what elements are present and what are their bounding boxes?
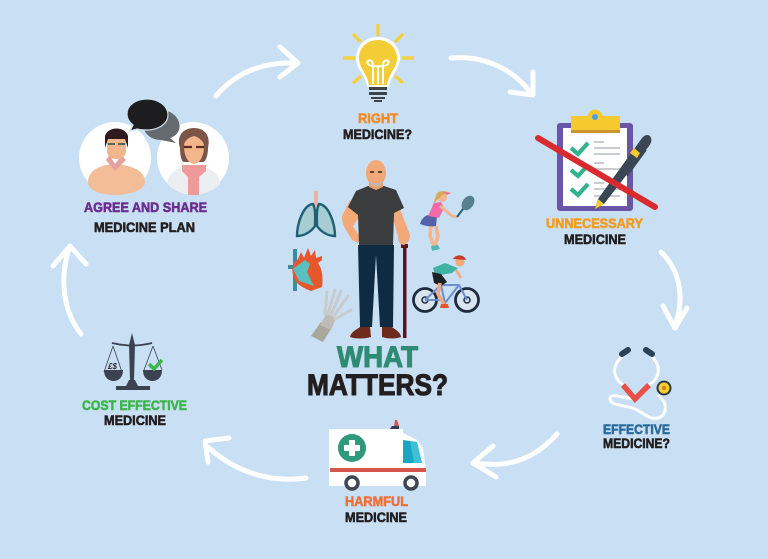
arrow: agree and share to right medicine xyxy=(216,47,298,96)
panel: unnecessary medicine xyxy=(538,110,655,247)
icon: ambulance xyxy=(329,420,426,489)
icon: pen xyxy=(595,135,651,209)
icon: black speech bubble xyxy=(127,99,168,131)
label: harmful: HARMFUL xyxy=(345,493,408,509)
arrow: effective medicine to harmful medicine xyxy=(473,434,557,477)
label: agree and share: AGREE AND SHARE xyxy=(84,199,207,215)
icon: skeletal hand xyxy=(311,290,351,342)
icon: heart xyxy=(288,248,323,291)
label: cost effective: COST EFFECTIVE xyxy=(82,397,187,413)
icon: stethoscope xyxy=(610,350,670,418)
icon: light bulb xyxy=(343,24,414,102)
panel: what matters centre xyxy=(288,160,478,402)
heading: what: WHAT xyxy=(337,341,418,374)
panel: harmful medicine xyxy=(329,420,426,525)
arrow: harmful medicine to cost effective medicine xyxy=(205,438,306,479)
label: medicine: MEDICINE xyxy=(564,231,626,247)
label: medicine?: MEDICINE? xyxy=(343,126,412,142)
panel: cost effective medicine xyxy=(82,333,187,428)
icon: lungs xyxy=(297,191,335,236)
panel: effective medicine xyxy=(603,350,670,451)
icon: female doctor xyxy=(157,122,229,195)
icon: grey speech bubble xyxy=(143,111,180,143)
label: medicine plan: MEDICINE PLAN xyxy=(94,219,195,235)
label: medicine: MEDICINE xyxy=(345,509,407,525)
icon: clipboard xyxy=(557,110,633,211)
icon: balance scale: £$ xyxy=(107,362,117,371)
panel: right medicine xyxy=(343,24,414,142)
label: medicine: MEDICINE xyxy=(104,412,166,428)
heading: matters?: MATTERS? xyxy=(307,369,448,402)
arrow: cost effective medicine to agree and share xyxy=(53,246,86,334)
icon: tennis player xyxy=(420,191,477,251)
icon: red cross-out line xyxy=(538,138,655,207)
icon: cyclist xyxy=(414,255,478,312)
label: right: RIGHT xyxy=(358,110,398,126)
arrow: right medicine to unnecessary medicine xyxy=(451,58,533,95)
label: effective: EFFECTIVE xyxy=(603,421,670,437)
arrow: unnecessary medicine to effective medicine xyxy=(661,252,687,328)
icon: male patient xyxy=(79,122,151,195)
label: medicine?: MEDICINE? xyxy=(603,435,670,451)
panel: agree and share medicine plan xyxy=(79,99,229,235)
label: unnecessary: UNNECESSARY xyxy=(546,215,644,231)
icon: elderly man with cane xyxy=(342,160,410,338)
